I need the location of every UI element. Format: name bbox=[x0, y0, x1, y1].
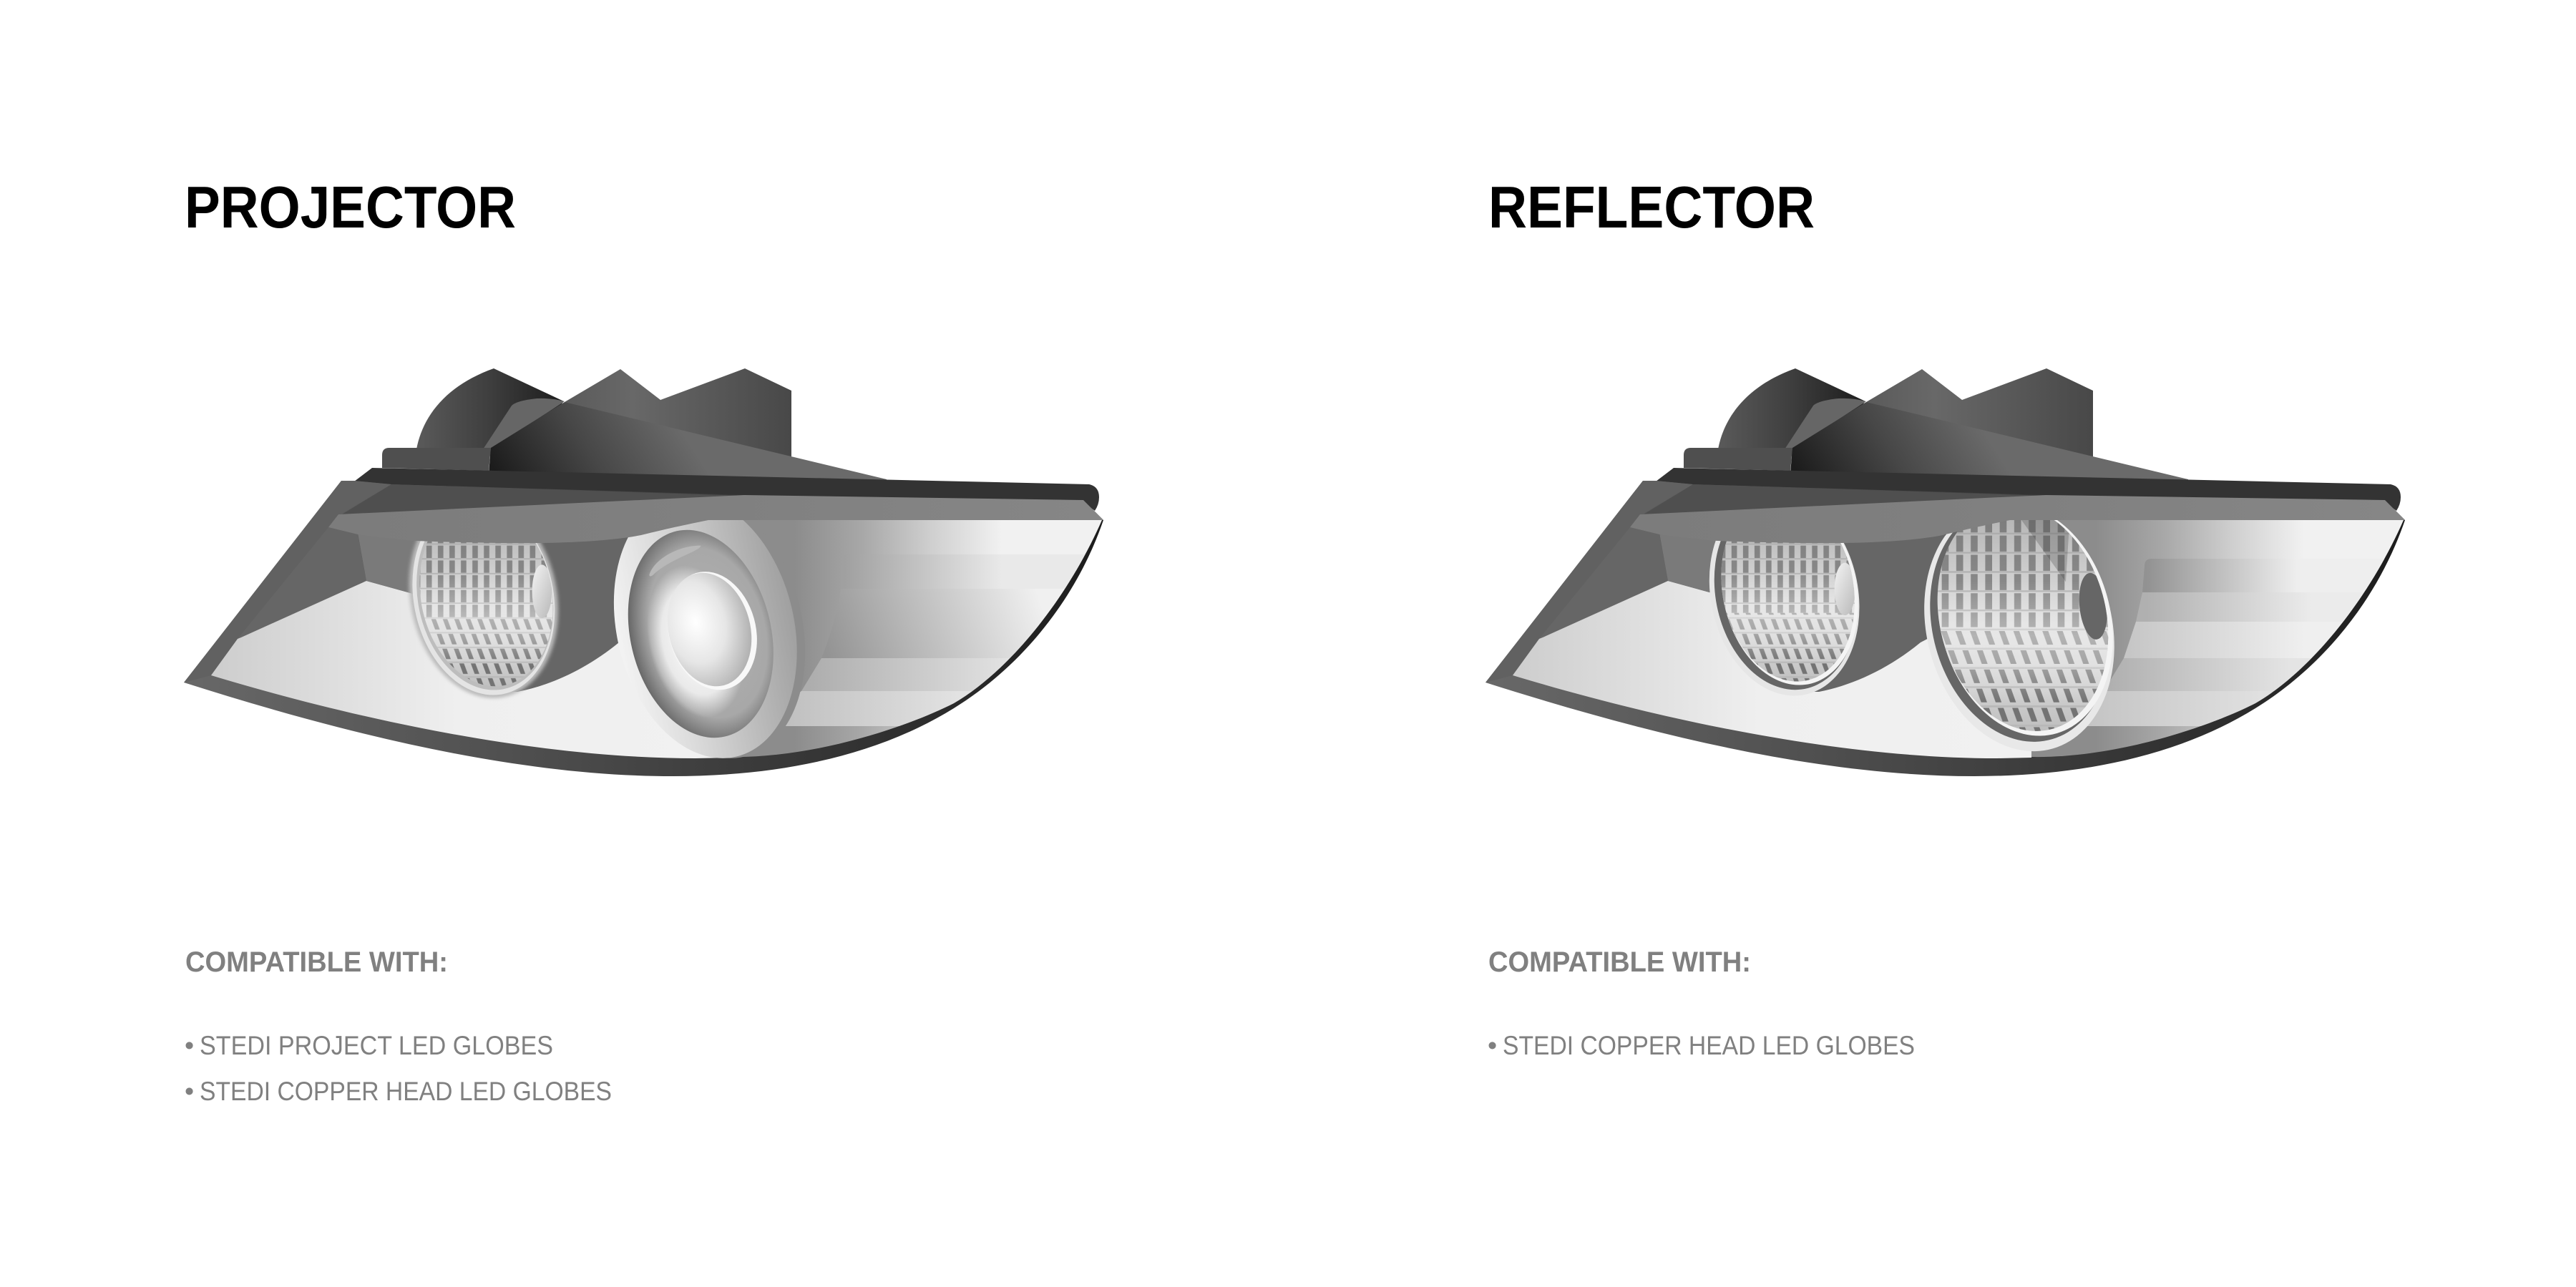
list: compatible globes: STEDI COPPER HEAD LED GLOBES bbox=[1503, 1030, 1915, 1060]
main reflector lens bbox=[1924, 520, 2114, 751]
list: compatible globes: • bbox=[1488, 1030, 1497, 1060]
label: compatible with: COMPATIBLE WITH: bbox=[1488, 946, 1751, 978]
recessed stepped panel bbox=[2087, 559, 2384, 726]
list: compatible globes: STEDI PROJECT LED GLOBES bbox=[200, 1030, 553, 1060]
lamp housing and body bbox=[184, 368, 1103, 776]
panel: reflector bbox=[1485, 174, 2411, 1060]
list: compatible globes: STEDI COPPER HEAD LED GLOBES bbox=[200, 1076, 612, 1106]
outer ring bbox=[614, 520, 797, 758]
label: compatible with: COMPATIBLE WITH: bbox=[185, 946, 448, 978]
list: compatible globes bbox=[185, 1030, 612, 1106]
reflector facets bbox=[1933, 515, 2114, 735]
top trim band bbox=[1630, 495, 2405, 543]
secondary reflector lens bbox=[1709, 541, 1859, 695]
illustration: projector headlight bbox=[184, 368, 1106, 776]
secondary reflector lens bbox=[407, 541, 561, 700]
top trim band bbox=[328, 495, 1103, 543]
bowl glow bbox=[649, 568, 739, 714]
list: compatible globes: • bbox=[185, 1076, 194, 1106]
dark ring bbox=[1930, 532, 2094, 742]
heading: projector: PROJECTOR bbox=[185, 174, 516, 240]
white inner edge bbox=[1943, 520, 2112, 735]
projector lens bbox=[614, 520, 800, 758]
highlight bbox=[649, 546, 701, 577]
list: compatible globes: • bbox=[185, 1030, 194, 1060]
lens crescent bbox=[670, 572, 757, 690]
outer rim bbox=[1924, 532, 2114, 751]
heading: reflector: REFLECTOR bbox=[1488, 174, 1815, 240]
lens glass bbox=[668, 572, 751, 687]
lamp housing and body bbox=[1485, 368, 2405, 776]
panel: projector bbox=[184, 174, 1106, 1106]
recessed stepped panel bbox=[786, 554, 1085, 726]
recessed bowl bbox=[628, 529, 774, 738]
illustration: reflector headlight bbox=[1485, 368, 2411, 776]
lens collar bbox=[727, 692, 800, 758]
